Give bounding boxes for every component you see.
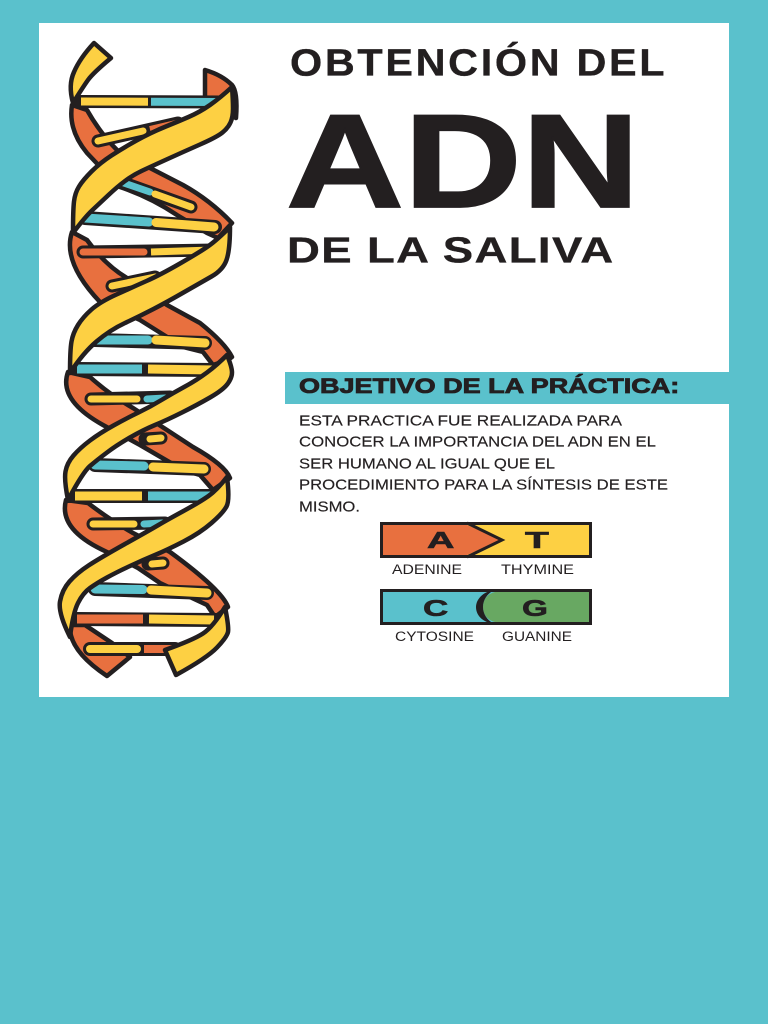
rung 14: yellow stub [148, 563, 163, 564]
text block: objective description: SER HUMANO AL IGUAL QUE EL [299, 456, 555, 472]
front strand: yellow ribbon [60, 43, 233, 675]
base pair rungs [75, 102, 222, 649]
rung 13: yellow and cyan [93, 523, 165, 524]
rung 15: cyan and yellow [95, 589, 207, 593]
rung 1: yellow and cyan [81, 95, 222, 108]
heading band: objetivo de la práctica [285, 372, 768, 404]
legend: adenine thymine pair: ADENINE [392, 562, 462, 577]
text block: objective description: PROCEDIMIENTO PARA LA SÍNTESIS DE ESTE [299, 476, 668, 494]
text block: objective description: ESTA PRACTICA FUE REALIZADA PARA [299, 414, 622, 430]
rung 9: yellow and cyan [91, 397, 170, 399]
text block: objective description [299, 414, 668, 516]
rung 2: yellow and orange [98, 123, 178, 141]
rung 4: cyan and yellow [85, 218, 215, 227]
legend: adenine thymine pair: T [525, 527, 549, 553]
back strand: orange ribbon [65, 70, 236, 676]
legend: adenine thymine pair: THYMINE [501, 562, 574, 577]
rung 3: cyan and yellow [118, 181, 191, 207]
panel: white card [39, 23, 729, 697]
rung 5: orange and yellow [83, 250, 215, 252]
text block: objective description: MISMO. [299, 500, 360, 516]
legend: adenine thymine pair: A [427, 527, 454, 553]
rung 12: yellow and cyan [75, 489, 214, 503]
rung 17: yellow and orange [90, 642, 175, 656]
legend: cytosine guanine pair: C [423, 596, 448, 621]
legend: adenine thymine pair [382, 523, 590, 577]
rung 6: yellow [112, 277, 155, 286]
title: OBTENCIÓN DEL: OBTENCIÓN DEL [290, 42, 667, 84]
rung 8: cyan and yellow [77, 369, 216, 370]
rung 11: cyan and yellow [95, 465, 204, 469]
rung 16: orange and yellow [77, 619, 216, 620]
heading band: objetivo de la práctica: OBJETIVO DE LA PRÁCTICA: [299, 374, 679, 398]
legend: cytosine guanine pair: G [522, 596, 548, 622]
rung 7: cyan and yellow [95, 340, 205, 343]
legend: cytosine guanine pair: CYTOSINE [395, 629, 474, 644]
subtitle: DE LA SALIVA: DE LA SALIVA [287, 230, 615, 270]
title: ADN: ADN [286, 86, 640, 236]
rung 10: yellow stub [145, 438, 161, 439]
legend: cytosine guanine pair [382, 590, 590, 644]
text block: objective description: CONOCER LA IMPORTANCIA DEL ADN EN EL [299, 434, 656, 450]
illustration: DNA double helix [60, 43, 236, 676]
legend: cytosine guanine pair: GUANINE [502, 629, 572, 644]
